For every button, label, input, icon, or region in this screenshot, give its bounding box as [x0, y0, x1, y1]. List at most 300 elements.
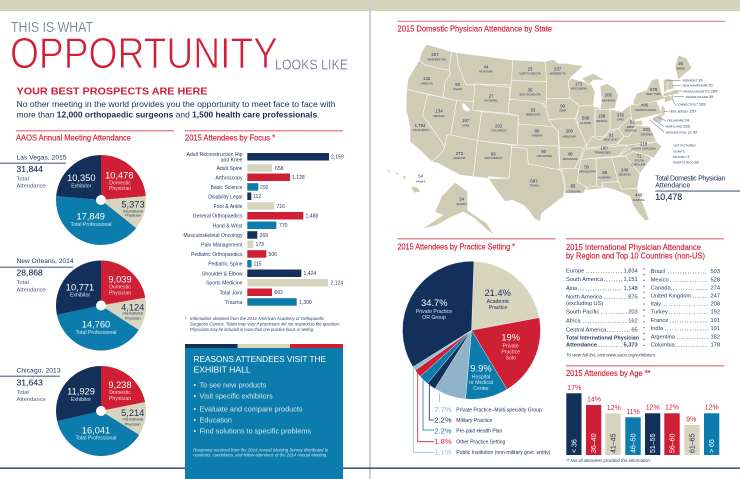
map of US states: OHIO	[617, 118, 624, 122]
pie labels: 19%	[501, 332, 520, 342]
map of US states: ILLINOIS	[580, 121, 591, 125]
map of US states: VIRGINIA	[641, 133, 653, 137]
legend: smaller practice settings: 7.7%	[434, 405, 452, 414]
title: OPPORTUNITY	[10, 30, 278, 78]
legend: smaller practice settings: Military Practice	[456, 418, 492, 424]
panel: reasons attendees visit the exhibit hall: Find solutions to specific problems	[200, 426, 311, 435]
bar chart: focus: 716	[276, 204, 285, 210]
footnote: focus: Information obtained from the 2014 American Academy of Orthopaedic	[190, 316, 325, 321]
map of US states: 85	[571, 183, 576, 188]
total domestic physician attendance: Attendance	[655, 183, 690, 190]
map of US states: 206	[605, 93, 613, 98]
map of US states: 68	[602, 170, 608, 175]
footnote: focus: *	[185, 316, 187, 321]
map of US states: MISSOURI	[563, 134, 576, 138]
Las Vegas attendance: 10,350	[67, 173, 96, 183]
map of US states: 486	[641, 103, 649, 108]
bar chart: focus: Pediatric Spine	[208, 262, 243, 268]
table: countries: 274	[710, 285, 720, 291]
pie labels: 9.9%	[470, 363, 492, 373]
map of US states: 173	[575, 81, 583, 86]
heading: practice setting: 2015 Attendees by Practice Setting *	[398, 242, 515, 251]
Chicago attendance: Domestic	[109, 390, 131, 396]
Las Vegas attendance: Physician	[125, 213, 141, 217]
table: countries: Brazil	[651, 269, 665, 275]
title: LOOKS LIKE	[275, 58, 348, 74]
title: THIS IS WHAT	[11, 20, 93, 36]
map of US states: 201	[643, 127, 651, 132]
New Orleans attendance: 10,771	[66, 283, 94, 293]
map of US states: MISSISSIPPI	[579, 169, 596, 173]
table: countries: 528	[710, 277, 720, 283]
map of US states: INDIANA	[596, 119, 607, 123]
map of US states: SOUTH DAKOTA	[519, 93, 541, 97]
pie chart: practice setting	[402, 261, 540, 399]
table: countries: 191	[710, 326, 720, 332]
panel: attendees by practice setting	[398, 238, 556, 457]
New Orleans attendance: 4,124	[121, 303, 144, 313]
New Orleans attendance	[0, 258, 146, 350]
table: countries: 178	[710, 342, 720, 348]
table: regions: 875	[628, 295, 638, 301]
bar chart: focus: Trauma	[225, 300, 243, 306]
legend: smaller practice settings	[413, 368, 551, 457]
Las Vegas attendance: Attendance	[16, 184, 46, 190]
legend: smaller practice settings: 2.2%	[434, 416, 452, 425]
map of US states: NEW HAMPSHIRE 51	[682, 83, 714, 88]
panel: reasons attendees visit the exhibit hall: •	[194, 381, 196, 390]
table: countries: United Kingdom	[651, 293, 691, 299]
panel: reasons attendees visit the exhibit hall: Visit specific exhibitors	[200, 392, 273, 401]
Las Vegas attendance: Las Vegas, 2015	[16, 154, 67, 161]
map of US states: WASHINGTON	[427, 58, 446, 62]
bar chart: focus: Musculoskeletal Oncology	[183, 233, 243, 239]
bar chart: focus: 1,128	[292, 175, 305, 181]
bar chart: focus: Pain Management	[201, 242, 243, 248]
pie labels: 21.4%	[485, 288, 511, 298]
map of US states: CALIFORNIA	[413, 128, 429, 132]
map of US states: 240	[621, 168, 629, 173]
map of US states: TEXAS	[530, 184, 539, 188]
table: countries: 192	[710, 310, 720, 316]
pie labels: Practice	[501, 349, 520, 355]
panel: annual meeting attendance	[0, 130, 174, 456]
map of US states: NEVADA	[434, 114, 445, 118]
map of US states: MARYLAND 225	[666, 123, 690, 128]
map of US states: 218	[640, 142, 648, 147]
map of US states: WEST	[627, 125, 635, 129]
bar chart: age: < 36	[572, 439, 578, 453]
New Orleans attendance: Exhibitor	[70, 292, 90, 298]
bar chart: focus: 112	[253, 194, 261, 200]
pie labels: Solo	[506, 355, 516, 361]
bar chart: age: 51–55	[650, 433, 657, 453]
Chicago attendance: Exhibitor	[71, 397, 91, 403]
New Orleans attendance: New Orleans, 2014	[16, 258, 74, 265]
map of US states: MICHIGAN	[602, 99, 615, 103]
panel: international physician attendance	[566, 238, 724, 358]
pie labels: Private Practice	[416, 309, 452, 315]
map of US states: MILITARY 3	[673, 154, 690, 159]
Chicago attendance: Total	[16, 390, 29, 396]
map of US states: 35	[528, 87, 533, 92]
footnote: focus: Physicians may be included in more than one practice focus or setting.	[190, 327, 314, 332]
map of US states: NORTH CAROLINA	[632, 147, 656, 151]
bar chart: focus: Shoulder & Elbow	[202, 271, 243, 277]
map of US states: 71	[637, 154, 642, 159]
Las Vegas attendance: Exhibitor	[71, 183, 92, 189]
map of US states: NEBRASKA	[526, 113, 541, 117]
footnote: age: ** Not all attendees provided this information.	[566, 458, 651, 463]
panel: attendees by age	[566, 365, 724, 463]
heading: international attendance: by Region and Top 10 Countries (non-US)	[566, 252, 705, 261]
map of US states: DELAWARE 24	[667, 118, 690, 123]
table: regions: 1,148	[623, 286, 638, 292]
map of US states: UTAH	[462, 124, 469, 128]
panel: reasons attendees visit the exhibit hall	[185, 344, 343, 479]
map of US states: WASHINGTON, DC 42	[666, 129, 698, 134]
Las Vegas attendance: 10,478	[105, 170, 134, 180]
panel: reasons attendees visit the exhibit hall: Evaluate and compare products	[200, 404, 303, 413]
table: regions: Attendance	[566, 343, 597, 349]
pie labels: Academic	[487, 299, 510, 305]
bar chart: focus: 2,124	[330, 280, 343, 286]
map of US states: IDAHO	[453, 87, 462, 91]
map of US states: VIRGINIA	[625, 129, 637, 133]
pie labels: 34.7%	[421, 298, 447, 308]
map of US states: PENNSYLVANIA	[635, 108, 656, 112]
bar chart: age: 12%	[665, 404, 679, 412]
panel: reasons attendees visit the exhibit hall: residents, candidates, and fellow attendees of the 2014 Annual Meeting.	[193, 453, 327, 458]
bar chart: age: 61–65	[690, 433, 696, 453]
panel: reasons attendees visit the exhibit hall: •	[194, 392, 196, 401]
New Orleans attendance: Total Professional	[76, 330, 116, 336]
map of US states: KENTUCKY	[604, 137, 619, 141]
map of US states: NEW JERSEY 257	[669, 109, 697, 114]
map of US states: ARIZONA	[453, 156, 466, 160]
pie labels: or Medical	[469, 380, 493, 386]
map of US states: 237	[554, 66, 562, 71]
bar chart: age: 17%	[567, 385, 581, 392]
map of US states: VERMONT 19	[682, 78, 703, 83]
total domestic physician attendance	[655, 175, 740, 202]
table: regions: South America	[566, 277, 604, 283]
map of US states: 273	[456, 151, 464, 156]
intro text block: YOUR BEST PROSPECTS ARE HERE	[16, 86, 208, 97]
map of US states: NEW MEXICO	[484, 156, 502, 160]
bar chart: focus: Pediatric Orthopaedics	[191, 252, 243, 258]
Las Vegas attendance: 5,373	[121, 200, 145, 210]
pie labels: OR Group	[422, 315, 446, 321]
Las Vegas attendance: Total Professional	[71, 222, 111, 228]
bar chart: age: > 65	[709, 439, 716, 453]
Chicago attendance: Physician	[125, 422, 141, 426]
bar chart: age: 41–45	[610, 433, 618, 453]
bar chart: age: 12%	[646, 404, 660, 412]
map of US states	[387, 44, 718, 234]
total domestic physician attendance: 10,478	[655, 192, 682, 202]
New Orleans attendance: Total	[16, 280, 29, 286]
bar chart: focus: 1,300	[299, 300, 312, 306]
bar chart: focus	[183, 152, 344, 306]
panel: reasons attendees visit the exhibit hall: •	[194, 415, 196, 424]
map of US states: 50	[455, 82, 461, 87]
pie labels	[416, 288, 520, 392]
bar chart: focus: Adult Reconstruction Hip	[186, 152, 243, 158]
bar chart: focus: 658	[275, 166, 284, 172]
Chicago attendance: Physician	[109, 396, 131, 402]
table: regions: Asia	[566, 286, 578, 292]
map of US states: 44	[484, 64, 489, 69]
map of US states: 878	[650, 87, 658, 92]
table: countries: Turkey	[651, 310, 668, 316]
bar chart: focus: 269	[260, 233, 268, 239]
map of US states: HAWAII	[416, 179, 426, 183]
legend: smaller practice settings: 2.2%	[434, 426, 452, 435]
bar chart: focus: Total Joint	[220, 290, 243, 296]
bar chart: age: 56–60	[670, 433, 676, 453]
map of US states: GUAM 1	[673, 149, 686, 154]
heading: age: 2015 Attendees by Age **	[566, 369, 650, 378]
bar chart: age: 9%	[686, 416, 696, 423]
bar chart: focus: 770	[279, 223, 288, 229]
table: countries: Argentina	[651, 334, 676, 340]
panel: domestic physician attendance by state	[387, 21, 740, 234]
Las Vegas attendance: Domestic	[109, 181, 131, 187]
map of US states: 180	[600, 145, 608, 150]
legend: smaller practice settings: Pre-paid Health Plan	[456, 429, 502, 435]
table: countries: 247	[710, 293, 720, 299]
map of US states: IOWA	[559, 109, 566, 113]
map of US states: 267	[431, 52, 439, 57]
intro text block: more than 12,000 orthopaedic surgeons and 1,500 health care professionals .	[16, 110, 319, 120]
map of US states: 158	[598, 113, 606, 118]
panel: attendees by focus	[183, 130, 344, 332]
map of US states: 91	[609, 133, 614, 138]
pie labels: Hospital	[472, 374, 490, 380]
table: regions: 65	[631, 327, 638, 333]
table: regions: 203	[628, 310, 638, 316]
New Orleans attendance: Physician	[109, 290, 131, 296]
map of US states: 90	[560, 103, 566, 108]
map of US states: NORTH DAKOTA	[519, 71, 541, 75]
table: countries: 182	[710, 334, 720, 340]
panel: reasons attendees visit the exhibit hall: REASONS ATTENDEES VISIT THE	[194, 354, 326, 364]
bar chart: focus: 2,159	[331, 154, 344, 160]
table: countries: 191	[710, 318, 720, 324]
map of US states: SOUTH	[635, 158, 644, 162]
table: regions: Africa	[566, 319, 581, 325]
bar chart: focus: 506	[268, 252, 277, 258]
legend: smaller practice settings: 1.1%	[434, 448, 452, 457]
bar chart: focus: Hand & Wrist	[213, 223, 243, 229]
bar chart: focus: Arthroscopy	[215, 175, 243, 181]
New Orleans attendance: 28,868	[16, 268, 43, 278]
note: full list: To view full list, visit www.aaos.org/exhibitors.	[566, 352, 656, 358]
bar chart: age: 12%	[607, 405, 621, 412]
table: countries: India	[651, 326, 664, 332]
Las Vegas attendance: Total	[16, 176, 29, 182]
bar chart: focus: 662	[274, 290, 283, 296]
footnote: focus: Surgeons Census. Totals may vary if physicians did not respond to the question.	[190, 322, 340, 327]
New Orleans attendance: International	[123, 312, 143, 316]
bar chart: focus: 173	[256, 242, 264, 248]
map of US states: 200	[566, 129, 574, 134]
Chicago attendance: Attendance	[16, 397, 46, 403]
table: countries: Mexico	[651, 277, 669, 283]
pie labels: Center	[473, 386, 489, 392]
map of US states: NEW YORK	[646, 92, 661, 96]
map of US states: PUERTO RICO 30	[673, 159, 700, 164]
map of US states: WISCONSIN	[571, 87, 587, 91]
table: countries: Canada	[651, 285, 671, 291]
table: regions: Europe	[566, 268, 584, 274]
bar chart: age: 11%	[626, 409, 640, 416]
bar chart: focus: 1,424	[304, 271, 316, 277]
table: regions: 1,151	[623, 277, 638, 283]
map of US states: MONTANA	[479, 70, 493, 74]
pie labels: Private	[503, 343, 519, 349]
bar chart: age	[566, 385, 719, 455]
total domestic physician attendance: Total Domestic Physician	[655, 175, 725, 182]
map of US states: 202	[495, 123, 503, 128]
panel: reasons attendees visit the exhibit hall: •	[194, 404, 196, 413]
Las Vegas attendance: Physician	[109, 186, 131, 192]
bar chart: focus: 292	[260, 185, 269, 191]
map of US states: 23	[528, 66, 533, 71]
table: countries: 593	[710, 269, 720, 275]
Las Vegas attendance: International	[123, 209, 143, 213]
bar chart: focus: and Knee	[221, 158, 243, 164]
table: regions: South Pacific	[566, 310, 599, 316]
Chicago attendance: International	[123, 418, 143, 422]
heading: international attendance	[566, 243, 705, 261]
table: regions: North America	[566, 295, 603, 301]
legend: smaller practice settings: Private Practice–Multi-specialty Group	[456, 407, 542, 413]
table: countries: France	[651, 318, 668, 324]
legend: smaller practice settings: 1.8%	[434, 437, 452, 446]
Las Vegas attendance: 17,849	[76, 211, 105, 221]
map of US states: TENNESSEE	[594, 150, 611, 154]
bar chart: focus: General Orthopaedics	[193, 214, 243, 220]
map of US states: KANSAS	[531, 134, 543, 138]
map of US states: WYOMING	[484, 98, 498, 102]
map of US states: CONNECTICUT 109	[676, 102, 706, 107]
map of US states: 697	[530, 178, 538, 183]
map of US states: NOT PICTURED:	[673, 143, 697, 147]
bar chart: age: 46–50	[630, 433, 638, 453]
intro text block	[16, 86, 336, 120]
map of US states: 53	[630, 120, 635, 125]
map of US states: RHODE ISLAND 39	[686, 94, 714, 99]
heading: domestic attendance: 2015 Domestic Physician Attendance by State	[398, 25, 553, 34]
panel: reasons attendees visit the exhibit hall: To see new products	[200, 381, 267, 390]
New Orleans attendance: Physician	[125, 316, 141, 320]
table: regions: 1,834	[623, 268, 638, 274]
map of US states: 132	[423, 76, 431, 81]
map of US states: 134	[435, 109, 443, 114]
map of US states: FLORIDA	[633, 198, 645, 202]
map of US states: 509	[582, 115, 590, 120]
Chicago attendance: Chicago, 2013	[16, 368, 61, 375]
bar chart: focus: 115	[254, 262, 262, 268]
map of US states: 26	[678, 61, 684, 66]
map of US states: ARKANSAS	[563, 157, 578, 161]
map of US states: 54	[418, 174, 424, 179]
bar chart: focus: Basic Science	[210, 185, 243, 191]
map of US states: 448	[635, 192, 643, 197]
table: regions: (excluding US)	[566, 301, 603, 307]
map of US states: OKLAHOMA	[537, 154, 552, 158]
intro text block: No other meeting in the world provides you the opportunity to meet face to face with	[16, 100, 336, 109]
bar chart: age: 36–40	[591, 433, 598, 453]
map of US states: MINNESOTA	[550, 71, 566, 75]
legend: smaller practice settings: Public Institution (non-military govt. entity)	[456, 450, 551, 456]
heading: international attendance: 2015 International Physician Attendance	[566, 243, 702, 252]
map of US states: CAROLINA	[631, 163, 645, 167]
panel: reasons attendees visit the exhibit hall: •	[194, 426, 196, 435]
Las Vegas attendance	[0, 154, 146, 245]
bar chart: focus: 1,488	[306, 213, 318, 219]
bar chart: focus: Foot & Ankle	[214, 204, 243, 210]
map of US states: ALASKA	[456, 202, 467, 206]
table: countries: Italy	[651, 301, 661, 307]
table: regions: 5,373	[623, 343, 638, 349]
New Orleans attendance: 9,039	[108, 275, 132, 285]
map of US states: 50	[584, 164, 590, 169]
Chicago attendance: Total Professional	[76, 436, 116, 442]
map of US states: 27	[489, 93, 494, 98]
New Orleans attendance: Domestic	[109, 285, 131, 291]
table: regions	[566, 268, 639, 349]
bar chart: focus: Disability Legal	[208, 194, 242, 200]
table: regions: 162	[628, 319, 638, 325]
pie labels: Practice	[489, 305, 507, 311]
Chicago attendance: 5,214	[121, 408, 144, 418]
Chicago attendance: 9,238	[108, 380, 132, 390]
bar chart: focus: Sports Medicine	[206, 281, 243, 287]
panel: reasons attendees visit the exhibit hall: EXHIBIT HALL	[194, 365, 251, 375]
map of US states: 376	[617, 112, 625, 117]
map of US states: 1,794	[415, 123, 426, 128]
map of US states: GEORGIA	[618, 173, 631, 177]
bar chart: age: 12%	[705, 404, 719, 412]
table: regions: Central America	[566, 327, 607, 333]
map of US states: 24	[459, 196, 465, 201]
bar chart: focus: Adult Spine	[216, 166, 243, 172]
New Orleans attendance: Attendance	[16, 288, 46, 294]
panel: reasons attendees visit the exhibit hall: Education	[200, 415, 232, 424]
table: countries	[651, 269, 720, 348]
table: countries: 208	[710, 301, 720, 307]
map of US states: LOUISIANA	[566, 189, 581, 193]
map of US states: 80	[541, 149, 547, 154]
table: countries: Columbia	[651, 342, 676, 348]
map of US states: 157	[462, 118, 470, 123]
footnote: focus	[185, 316, 340, 332]
map of US states: 66	[491, 151, 496, 156]
Chicago attendance: 31,643	[16, 378, 43, 388]
legend: smaller practice settings: Other Practice Setting	[456, 439, 505, 445]
map of US states: OREGON	[421, 81, 433, 85]
Chicago attendance	[0, 366, 146, 456]
New Orleans attendance: 14,760	[82, 319, 110, 329]
heading: attendees by focus: 2015 Attendees by Focus *	[185, 133, 275, 142]
map of US states: ALABAMA	[598, 175, 611, 179]
table: regions: Total International Physician	[566, 336, 639, 342]
Las Vegas attendance: 31,844	[16, 164, 43, 174]
map of US states: MASSACHUSETTS 209	[683, 88, 718, 93]
